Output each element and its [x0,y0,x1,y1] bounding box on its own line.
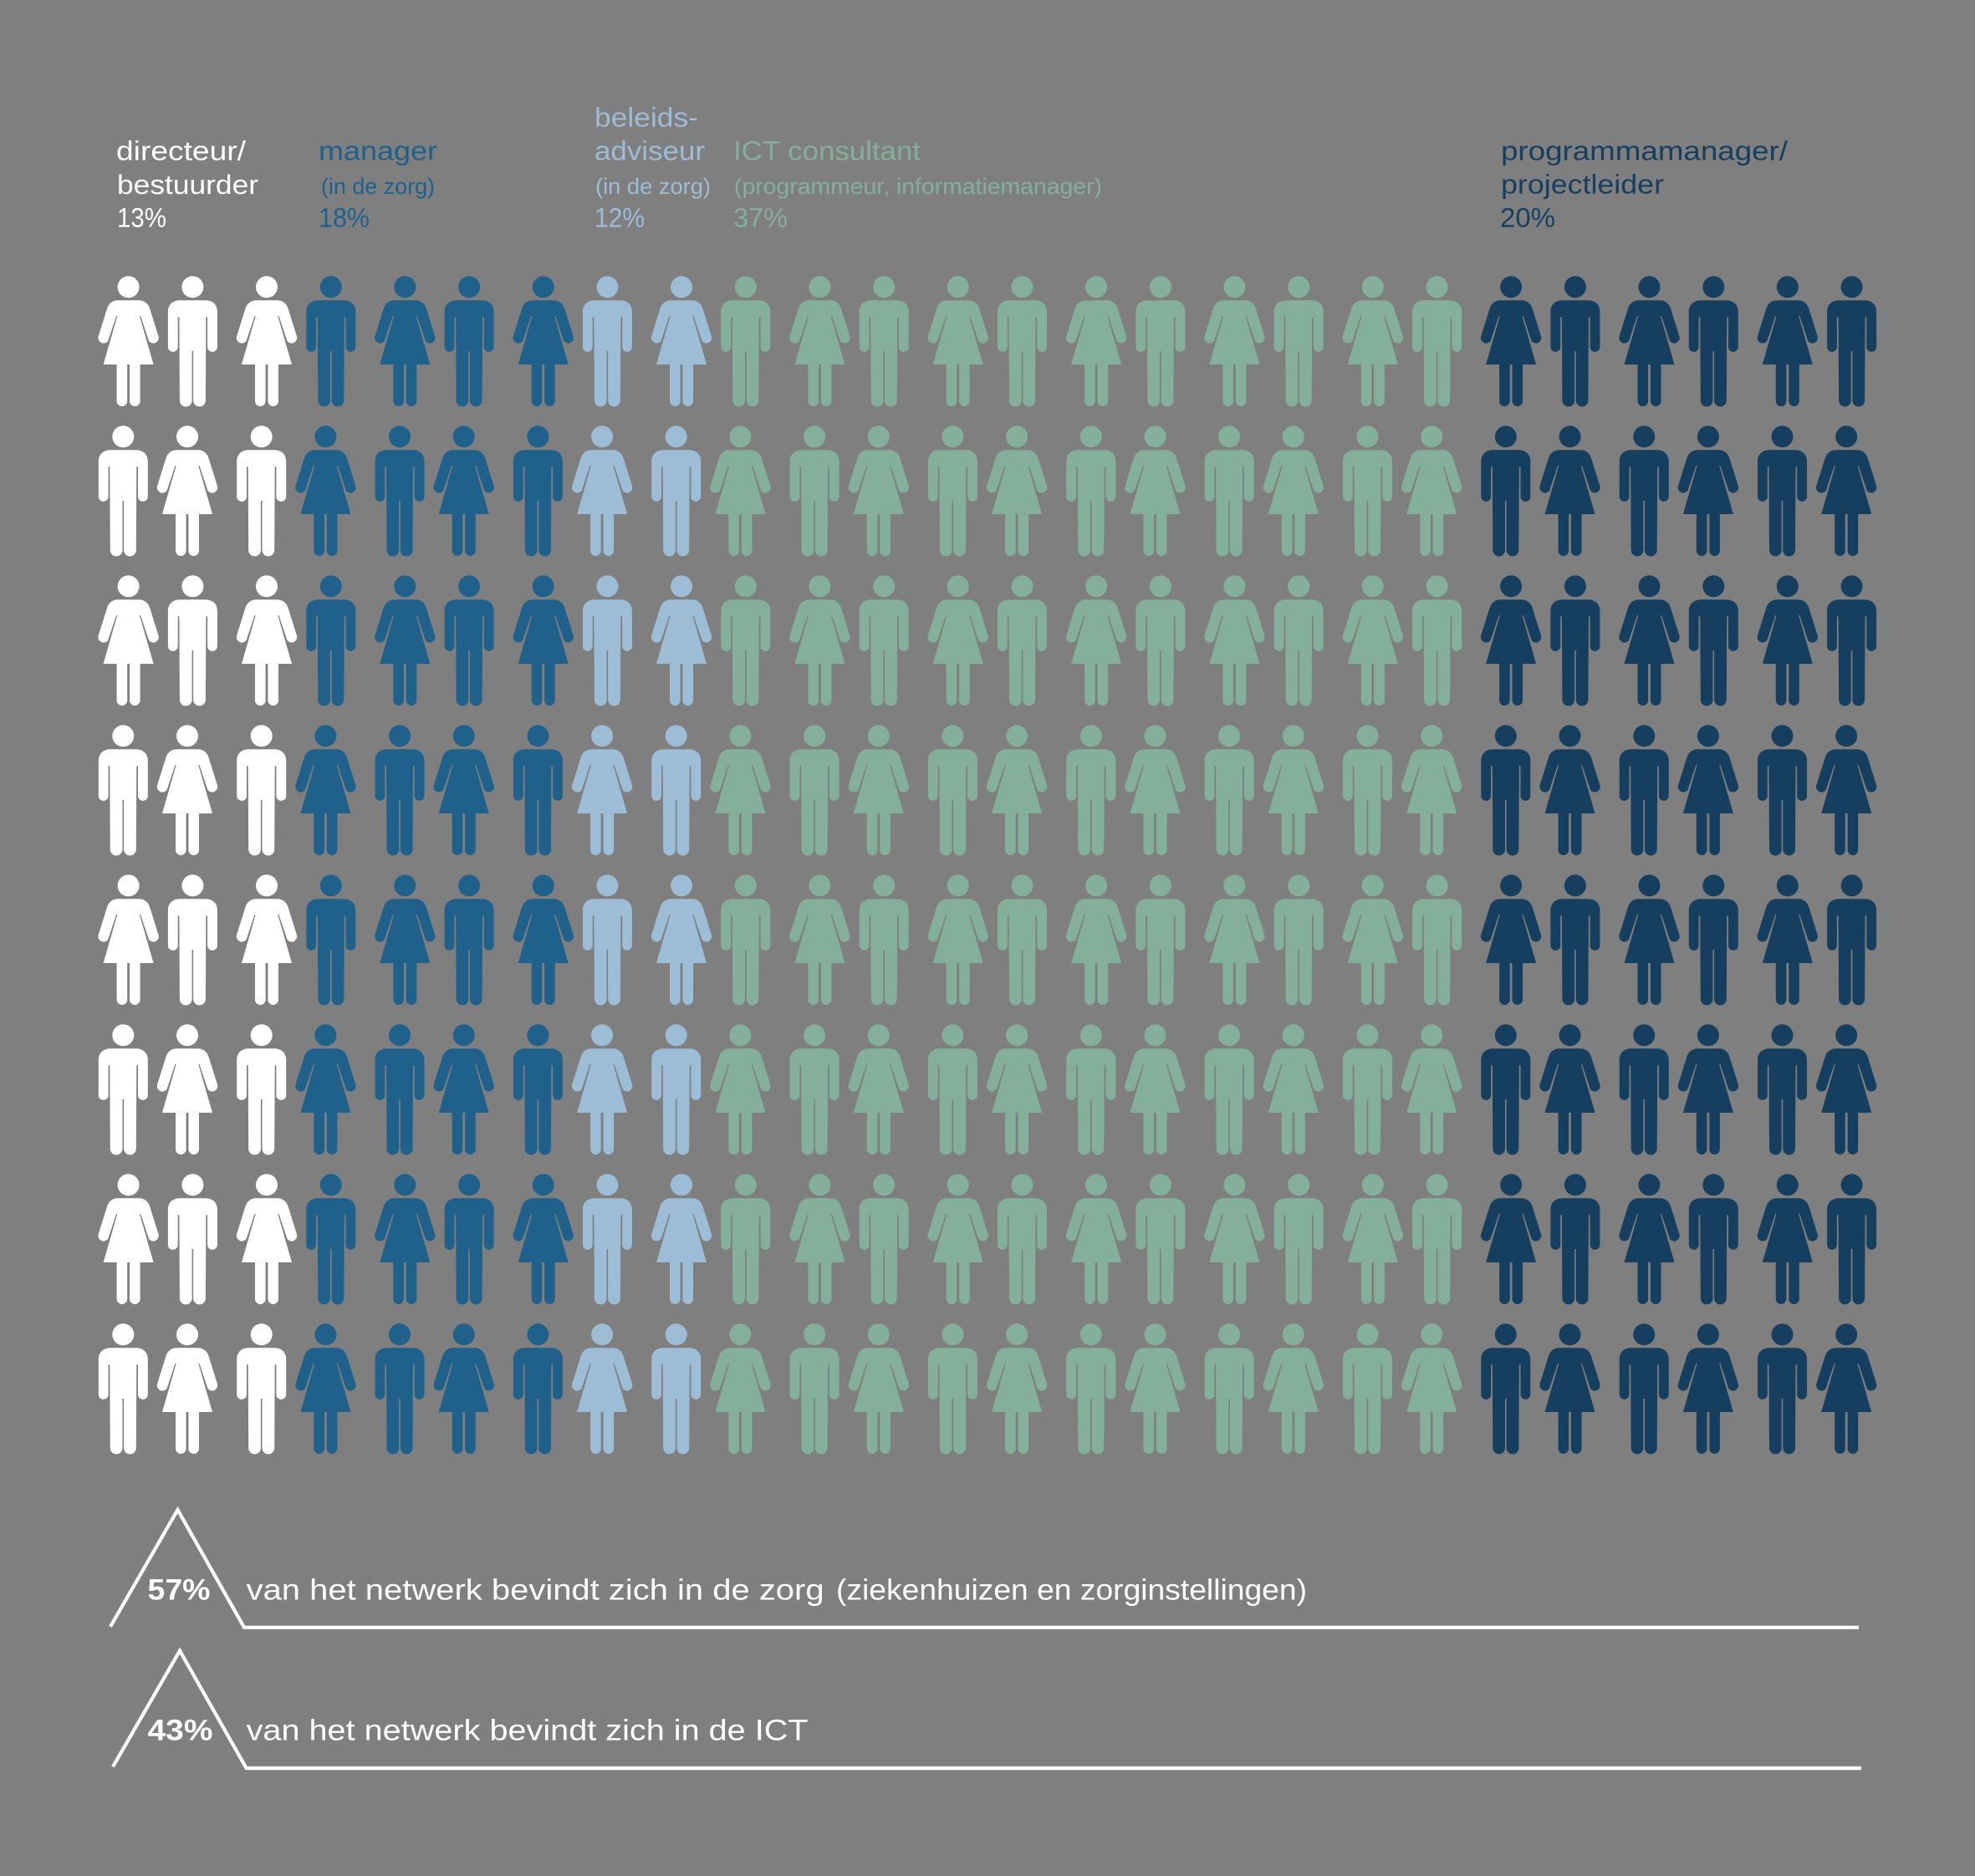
pictogram row 1 [98,276,1876,406]
legend: ICT consultant 37%: ICT consultant [733,136,921,166]
legend: directeur/bestuurder 13%: directeur/ [116,136,246,166]
pictogram row 6 [99,1024,1876,1155]
legend: directeur/bestuurder 13%: bestuurder [117,170,258,200]
legend: programmamanager/projectleider 20%: 20% [1500,203,1555,233]
legend: programmamanager/projectleider 20%: programmamanager/ [1501,136,1788,166]
legend: beleidsadviseur 12%: adviseur [595,136,705,166]
legend: beleidsadviseur 12%: beleids- [595,103,698,133]
text: ICT: van het netwerk bevindt zich in de ICT [247,1715,809,1747]
legend: ICT consultant 37%: 37% [733,203,788,233]
pictogram row 5 [98,874,1876,1005]
pictogram row 7 [98,1174,1876,1304]
legend: ICT consultant 37%: (programmeur, informatiemanager) [734,174,1102,199]
pictogram row 3 [98,575,1876,706]
pictogram row 8 [99,1323,1876,1454]
pictogram row 2 [99,426,1876,556]
pictogram row 4 [99,725,1876,855]
value 57%: 57% [147,1573,211,1606]
text: zorg: van het netwerk bevindt zich in de zorg [247,1573,824,1606]
legend: manager 18% [319,136,437,233]
triangle line 57% [110,1510,1859,1628]
callout: 43% ICT [113,1650,1861,1768]
legend: manager 18%: (in de zorg) [321,174,435,199]
legend: beleidsadviseur 12% [595,103,711,233]
legend: programmamanager/projectleider 20%: projectleider [1501,170,1664,200]
legend: programmamanager/projectleider 20% [1500,136,1788,233]
value 43%: 43% [147,1715,212,1747]
legend: directeur/bestuurder 13%: 13% [117,203,166,233]
legend: beleidsadviseur 12%: (in de zorg) [595,174,711,199]
legend: beleidsadviseur 12%: 12% [595,203,645,233]
legend: manager 18%: 18% [319,203,370,233]
legend: ICT consultant 37% [733,136,1102,233]
legend: manager 18%: manager [319,136,437,166]
callout: 57% zorg [110,1510,1859,1628]
text: ziekenhuizen: (ziekenhuizen en zorginstellingen) [836,1573,1307,1606]
triangle line 43% [113,1650,1861,1768]
legend: directeur/bestuurder 13% [116,136,258,233]
